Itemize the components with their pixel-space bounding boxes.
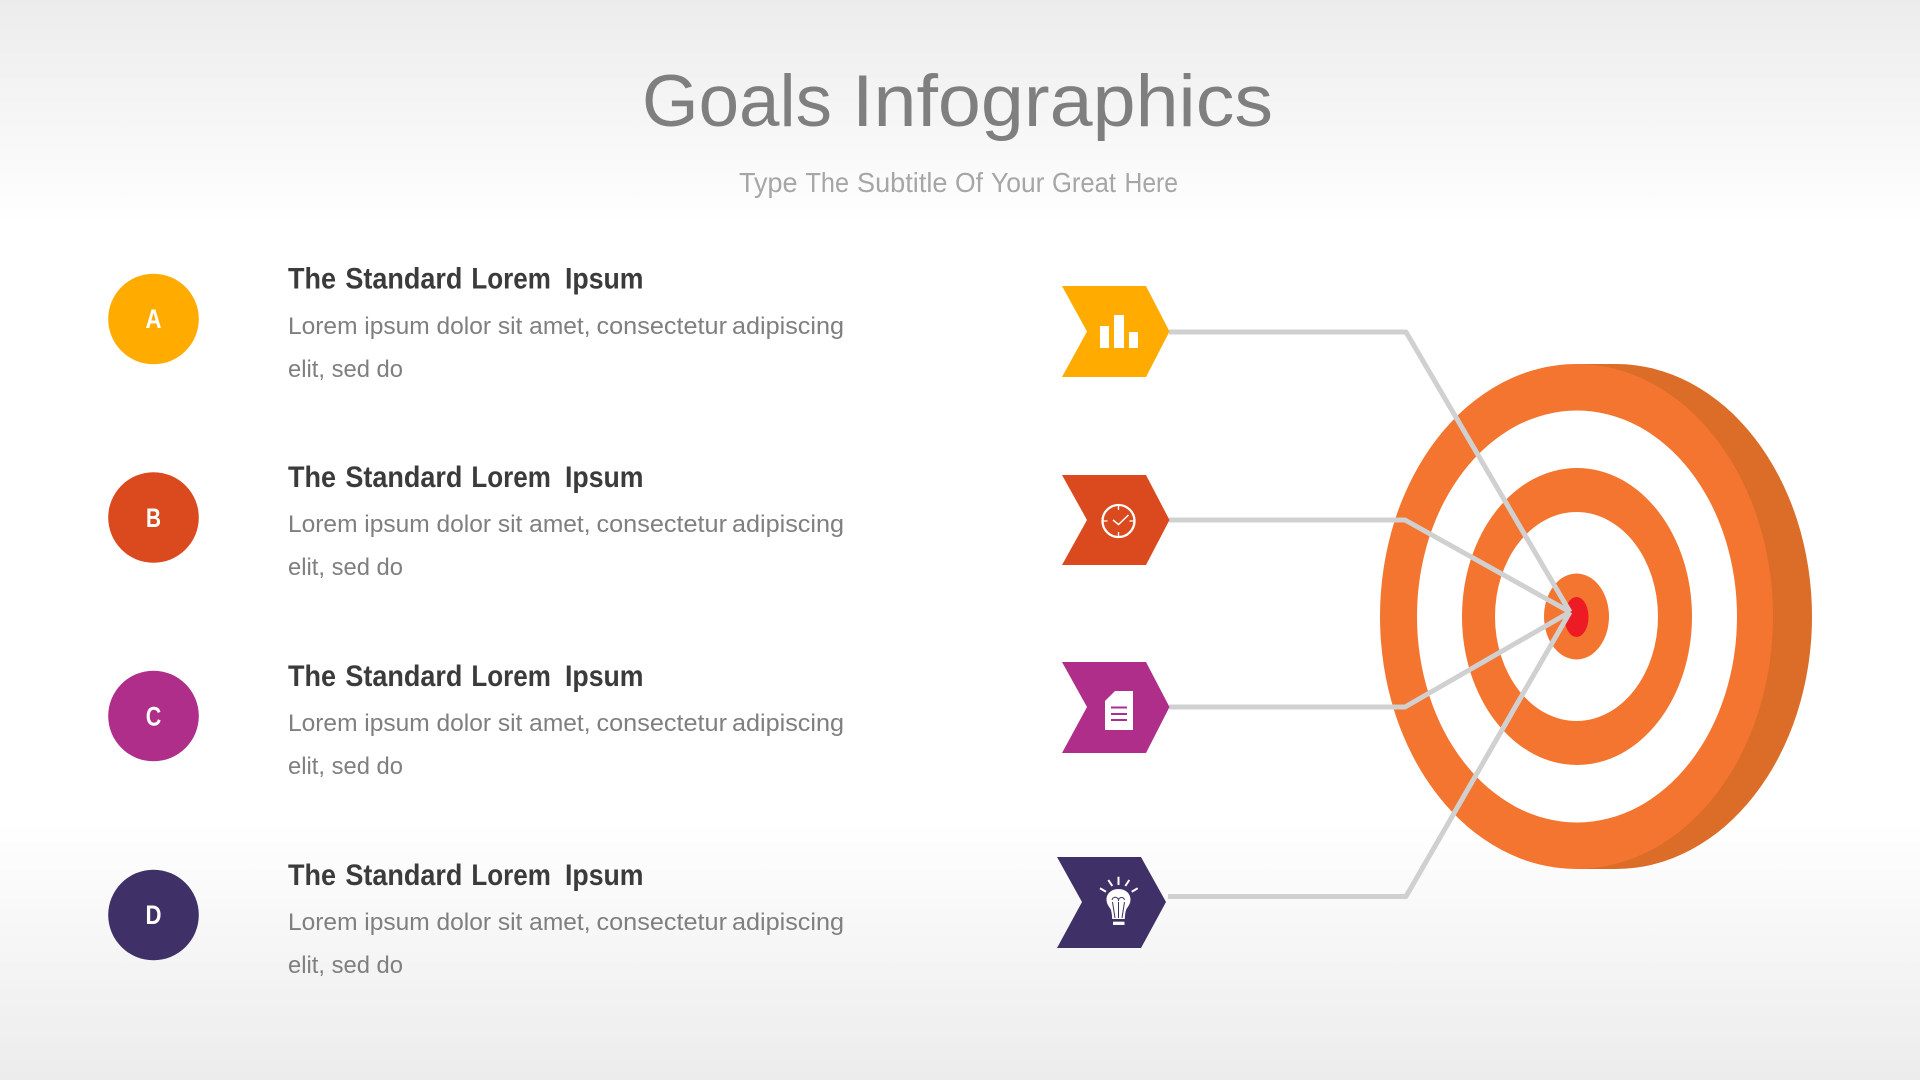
badge D: D bbox=[146, 900, 162, 930]
body C: Lorem ipsum dolor sit amet, bbox=[288, 710, 590, 737]
heading C: The bbox=[288, 660, 336, 693]
target side bbox=[1577, 364, 1812, 869]
target inner white bbox=[1495, 512, 1658, 721]
body D: Lorem ipsum dolor sit amet, bbox=[288, 909, 590, 936]
body B: Lorem ipsum dolor sit amet, bbox=[288, 511, 590, 538]
item C bbox=[108, 660, 844, 780]
heading A: Ipsum bbox=[565, 262, 644, 296]
body A: elit, sed do bbox=[288, 356, 403, 383]
badge A bbox=[108, 274, 199, 364]
body D bbox=[288, 909, 844, 979]
subtitle: The bbox=[806, 167, 849, 198]
subtitle: Of bbox=[955, 167, 983, 198]
heading C: Ipsum bbox=[565, 660, 644, 693]
heading A: Lorem bbox=[471, 262, 551, 296]
badge D bbox=[108, 870, 199, 960]
line D bbox=[1168, 612, 1570, 896]
item B bbox=[108, 461, 844, 581]
heading B: The bbox=[288, 461, 336, 494]
connector lines bbox=[1168, 332, 1570, 896]
heading B: Lorem bbox=[471, 461, 551, 494]
heading C: Standard bbox=[345, 660, 462, 693]
icon: document bbox=[1105, 691, 1133, 730]
body D: elit, sed do bbox=[288, 952, 403, 979]
line C bbox=[1169, 612, 1570, 707]
subtitle: Your bbox=[991, 167, 1044, 198]
body A bbox=[288, 313, 844, 383]
subtitle: Type bbox=[739, 167, 798, 198]
heading D: Lorem bbox=[471, 859, 551, 892]
item A bbox=[108, 262, 844, 383]
body C: elit, sed do bbox=[288, 753, 403, 780]
body B: consectetur bbox=[596, 511, 727, 538]
heading C: Lorem bbox=[471, 660, 551, 693]
body B: elit, sed do bbox=[288, 554, 403, 581]
title: Infographics bbox=[852, 61, 1273, 142]
bullseye bbox=[1564, 597, 1588, 637]
body C: adipiscing bbox=[732, 710, 844, 737]
body D: consectetur bbox=[596, 909, 727, 936]
badge C bbox=[108, 671, 199, 761]
body B: adipiscing bbox=[732, 511, 844, 538]
subtitle: Great bbox=[1052, 167, 1116, 198]
body A: consectetur bbox=[596, 313, 727, 340]
icon: clock bbox=[1102, 505, 1134, 537]
heading D: Ipsum bbox=[565, 859, 644, 892]
target centre bbox=[1544, 574, 1609, 660]
badge C: C bbox=[146, 702, 161, 732]
chevron A with bar chart icon bbox=[1062, 286, 1170, 377]
heading B: Standard bbox=[345, 461, 462, 494]
body B bbox=[288, 511, 844, 581]
body A: adipiscing bbox=[732, 313, 844, 340]
heading A: The bbox=[288, 262, 336, 296]
badge B: B bbox=[146, 503, 161, 533]
chevron B with clock icon bbox=[1062, 475, 1170, 565]
heading D: Standard bbox=[345, 859, 462, 892]
heading D: The bbox=[288, 859, 336, 892]
chevron D with light bulb icon bbox=[1057, 857, 1166, 948]
icon: bar chart bbox=[1100, 315, 1138, 348]
body D: adipiscing bbox=[732, 909, 844, 936]
target outer ring bbox=[1380, 364, 1773, 869]
body C: consectetur bbox=[596, 710, 727, 737]
target white ring bbox=[1417, 410, 1737, 822]
target bbox=[1380, 364, 1812, 869]
title: Goals bbox=[642, 61, 832, 142]
chevron C with document icon bbox=[1062, 662, 1170, 753]
heading A: Standard bbox=[345, 262, 462, 296]
icon: light bulb bbox=[1100, 877, 1138, 923]
line A bbox=[1169, 332, 1570, 612]
line B bbox=[1169, 520, 1570, 612]
badge B bbox=[108, 472, 199, 563]
subtitle: Subtitle bbox=[857, 167, 948, 198]
item D bbox=[108, 859, 844, 979]
body C bbox=[288, 710, 844, 780]
body A: Lorem ipsum dolor sit amet, bbox=[288, 313, 590, 340]
target inner ring bbox=[1462, 468, 1692, 765]
subtitle: Here bbox=[1124, 167, 1178, 198]
heading B: Ipsum bbox=[565, 461, 644, 494]
badge A: A bbox=[146, 304, 162, 334]
